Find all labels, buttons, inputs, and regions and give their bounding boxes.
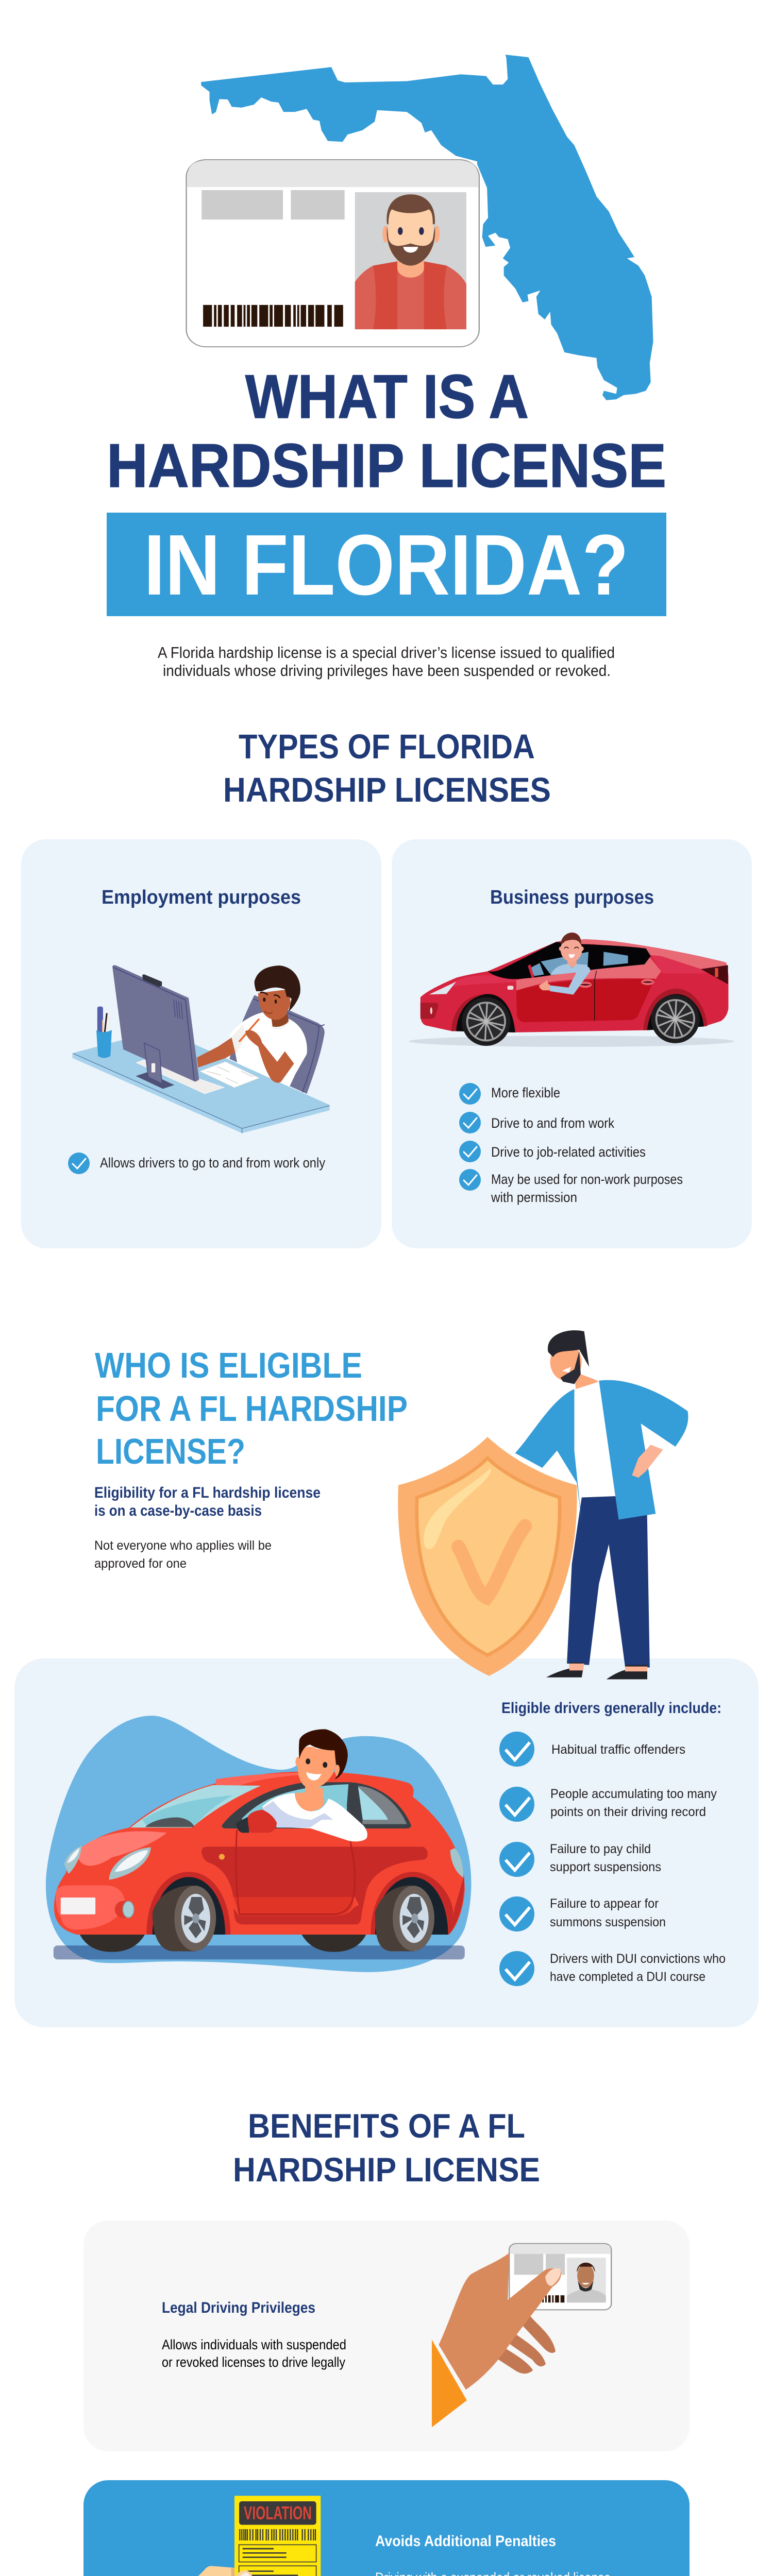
heading: benefits: HARDSHIP LICENSE xyxy=(233,2150,540,2189)
check bullet 4 xyxy=(459,1169,481,1191)
subheading: case by case xyxy=(94,1484,321,1519)
subheading: case by case: is on a case-by-case basis xyxy=(94,1502,262,1519)
heading: eligible drivers: Eligible drivers generally include: xyxy=(501,1700,721,1717)
illustration: hand holding violation ticket xyxy=(161,2496,321,2576)
title banner: in Florida: IN FLORIDA? xyxy=(144,517,629,613)
heading: types of licenses: TYPES OF FLORIDA xyxy=(239,727,535,766)
check item 2: points on their driving record xyxy=(550,1805,706,1819)
text: not everyone approved: Not everyone who applies will be xyxy=(94,1538,272,1553)
heading: benefits: BENEFITS OF A FL xyxy=(248,2107,525,2145)
text: not everyone approved xyxy=(94,1538,272,1571)
benefit heading: Legal Driving Privileges xyxy=(162,2299,315,2316)
bullet text 4 xyxy=(491,1172,683,1205)
check item 5 xyxy=(499,1951,726,1986)
bullet text 4: with permission xyxy=(491,1190,577,1205)
heading: who is eligible: FOR A FL HARDSHIP xyxy=(96,1388,408,1429)
benefit text xyxy=(162,2337,346,2370)
intro text: individuals whose driving privileges have been suspended or revoked. xyxy=(163,662,611,680)
check bullet xyxy=(68,1153,90,1174)
title xyxy=(107,362,666,500)
intro text: A Florida hardship license is a special driver’s license issued to qualified xyxy=(158,643,615,662)
check bullet 2 xyxy=(459,1112,481,1133)
intro text xyxy=(158,643,615,680)
heading: benefits xyxy=(233,2107,540,2189)
heading: who is eligible: LICENSE? xyxy=(96,1431,245,1471)
subheading: case by case: Eligibility for a FL hardship license xyxy=(94,1484,321,1501)
title: WHAT IS A xyxy=(245,362,529,431)
check item 3: Failure to pay child xyxy=(550,1842,651,1856)
panel: employment purposes xyxy=(21,839,381,1248)
icon: Florida map xyxy=(201,55,653,400)
benefit heading: Avoids Additional Penalties xyxy=(375,2533,556,2550)
check item 1: Habitual traffic offenders xyxy=(551,1742,685,1757)
illustration: man in red car xyxy=(409,933,734,1047)
check item 5: have completed a DUI course xyxy=(550,1970,705,1984)
bullet text 4: May be used for non-work purposes xyxy=(491,1172,683,1187)
bullet text 1: More flexible xyxy=(491,1085,560,1100)
title: HARDSHIP LICENSE xyxy=(107,431,666,500)
check item 1 xyxy=(499,1732,685,1767)
check item 2 xyxy=(499,1787,717,1822)
panel heading: Business purposes xyxy=(490,887,654,908)
illustration: hand holding license xyxy=(432,2244,611,2427)
illustration: hand holding violation ticket: VIOLATION xyxy=(244,2502,312,2523)
bullet text 3: Drive to job-related activities xyxy=(491,1144,646,1160)
bullet text: Allows drivers to go to and from work only xyxy=(100,1155,325,1171)
bullet text 2: Drive to and from work xyxy=(491,1115,614,1131)
panel heading: Employment purposes xyxy=(102,887,301,908)
check item 4: Failure to appear for xyxy=(550,1896,659,1911)
check item 2: People accumulating too many xyxy=(550,1787,717,1801)
check bullet 1 xyxy=(459,1083,481,1105)
text: not everyone approved: approved for one xyxy=(94,1556,187,1571)
benefit text: Allows individuals with suspended xyxy=(162,2337,346,2352)
benefit text: or revoked licenses to drive legally xyxy=(162,2354,345,2370)
heading: who is eligible xyxy=(95,1345,408,1471)
check item 4 xyxy=(499,1896,666,1931)
panel: legal driving privileges xyxy=(83,2221,690,2451)
hero illustration: Florida map and ID card xyxy=(187,55,653,400)
illustration: man in red hatchback xyxy=(46,1716,471,1972)
icon: driver's license card xyxy=(187,160,479,347)
heading: types of licenses: HARDSHIP LICENSES xyxy=(223,771,551,809)
check bullet 3 xyxy=(459,1141,481,1162)
check item 4: summons suspension xyxy=(550,1915,666,1929)
check item 3: support suspensions xyxy=(550,1860,661,1874)
illustration: person at desk xyxy=(72,965,330,1133)
panel: avoids additional penalties xyxy=(83,2480,690,2576)
heading: types of licenses xyxy=(223,727,551,809)
panel: business purposes xyxy=(392,839,752,1248)
illustration: man with shield xyxy=(398,1330,688,1680)
heading: who is eligible: WHO IS ELIGIBLE xyxy=(95,1345,362,1385)
panel: eligible drivers xyxy=(14,1658,759,2027)
check item 5: Drivers with DUI convictions who xyxy=(550,1952,726,1966)
check item 3 xyxy=(499,1842,661,1877)
